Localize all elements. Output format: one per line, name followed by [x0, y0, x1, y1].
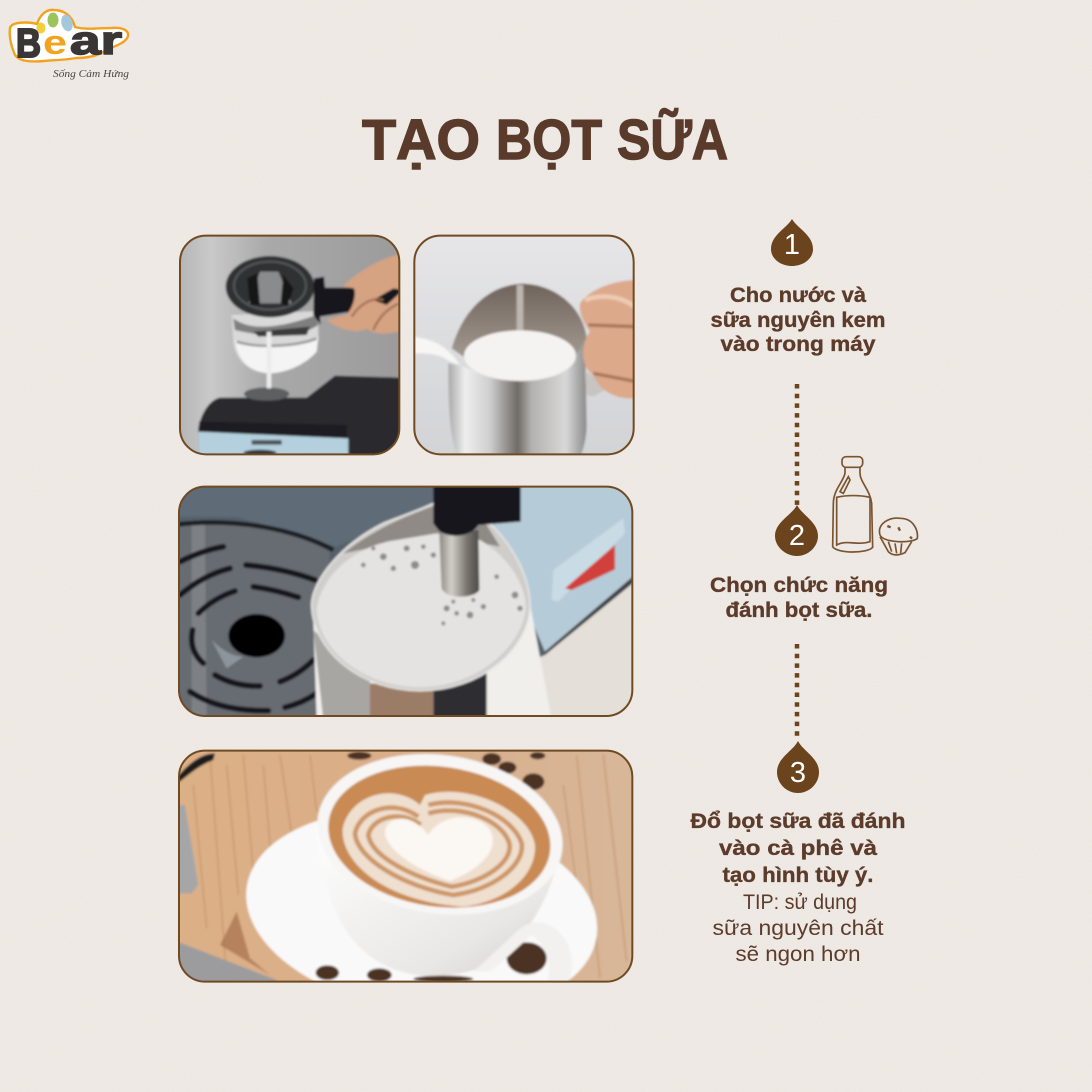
step 3 text: vào cà phê và: [719, 837, 877, 860]
step 3 text: Đổ bọt sữa đã đánh: [690, 810, 906, 833]
step 3 drop icon: [777, 741, 819, 793]
tip text: sẽ ngon hơn: [736, 943, 860, 966]
logo wordmark: B: [16, 20, 41, 66]
tip text: sữa nguyên chất: [712, 917, 884, 940]
step 2 text: đánh bọt sữa.: [726, 599, 872, 622]
glass carafe with water: [232, 311, 318, 388]
panel border: [180, 236, 399, 454]
milk being poured: [414, 337, 460, 365]
machine body: [198, 376, 403, 458]
step 1 text: sữa nguyên kem: [710, 309, 886, 332]
logo paw prints: [36, 12, 75, 34]
carafe lid: [226, 256, 314, 317]
wood shadow: [220, 912, 270, 975]
dotted connector 1: [795, 384, 799, 506]
steam wand: [433, 482, 521, 597]
tip text: TIP: sử dụng: [743, 891, 857, 914]
panel: photo steaming milk: [173, 482, 637, 720]
cup rim: [316, 752, 564, 914]
beans: [316, 752, 547, 982]
pitcher body: [313, 603, 552, 720]
title: [362, 108, 728, 172]
step 3 drop icon: 3: [790, 757, 806, 789]
machine front panel: [491, 488, 632, 715]
cup body: [345, 876, 553, 977]
panel border: [179, 487, 632, 716]
saucer: [244, 820, 599, 981]
step 1 text: [710, 284, 886, 356]
icon: muffin: [879, 518, 917, 555]
panel: photo pouring water into machine: [177, 232, 403, 458]
step 3 text: [690, 810, 906, 966]
pitcher handle: [586, 372, 604, 396]
logo: Bear: [10, 10, 130, 80]
step 1 text: Cho nước và: [730, 284, 866, 307]
step 1 drop icon: 1: [784, 229, 800, 261]
logo wordmark: e: [43, 24, 67, 62]
milk surface: [464, 330, 576, 381]
panel: photo latte art: [178, 750, 634, 983]
cup handle: [479, 924, 570, 980]
coffee: [327, 764, 552, 910]
logo wordmark: ar: [70, 19, 122, 63]
pitcher rim and inner wall: [312, 503, 530, 691]
icon: milk bottle: [833, 457, 873, 552]
hand: [580, 280, 637, 399]
step 1 text: vào trong máy: [720, 333, 876, 356]
step 2 text: Chọn chức năng: [710, 574, 888, 597]
panel border: [414, 236, 634, 454]
panel border: [179, 751, 632, 982]
dotted connector 2: [795, 644, 799, 736]
step 2 text: [710, 574, 888, 622]
step 3 text: tạo hình tùy ý.: [722, 864, 874, 887]
pitcher body: [448, 338, 587, 458]
logo wordmark: [16, 19, 122, 66]
carafe handle: [312, 276, 356, 325]
step 2 drop icon: [775, 505, 818, 556]
hand: [327, 253, 403, 334]
title: BỌT: [496, 108, 602, 172]
step 2 drop icon: 2: [789, 520, 805, 552]
tip text: [712, 891, 884, 966]
step 1 drop icon: [771, 219, 813, 266]
pitcher inner wall: [452, 284, 587, 358]
machine parts at edges: [173, 753, 277, 985]
title: SỮA: [617, 108, 728, 172]
milk foam: [317, 533, 526, 687]
panel: photo milk pitcher: [410, 232, 637, 458]
drip tray: [173, 522, 333, 720]
title: TẠO: [362, 108, 480, 172]
latte art heart: [343, 792, 535, 907]
logo slogan: Sống Cảm Hứng: [53, 68, 130, 80]
